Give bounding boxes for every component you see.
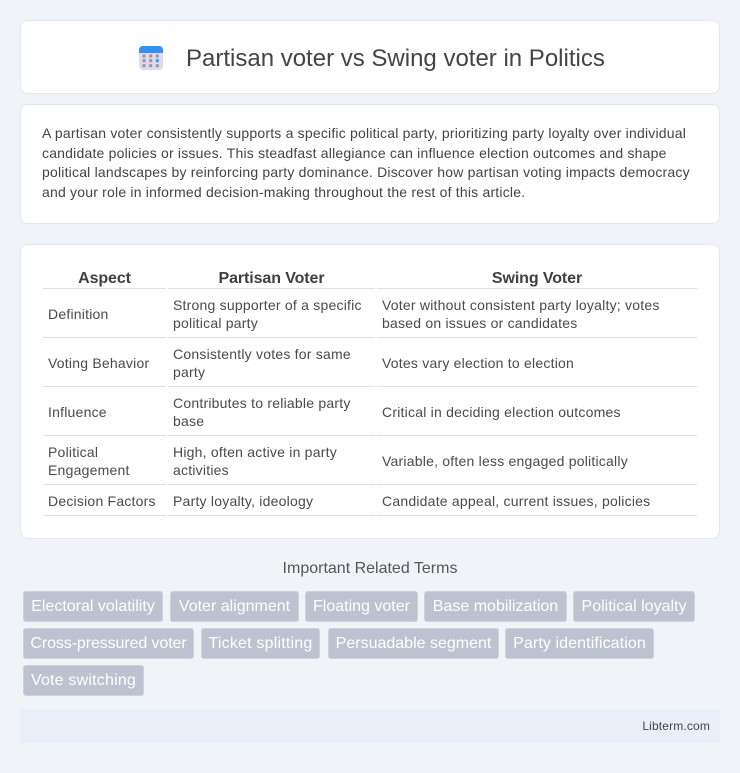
- panel: header: [20, 20, 720, 94]
- text: Strong supporter of a specific: [173, 297, 362, 313]
- row: Political Engagement: Political: [48, 444, 98, 460]
- text block: introduction: political landscapes by reinforcing party dominance. Discover how partisan voting impacts democracy: [42, 164, 690, 180]
- tag: [328, 628, 499, 659]
- text: Party loyalty, ideology: [173, 493, 313, 509]
- text: Consistently votes for same: [173, 346, 351, 362]
- text block: introduction: and your role in informed decision-making throughout the rest of this article.: [42, 184, 525, 200]
- text: base: [173, 413, 204, 429]
- header: Aspect: Aspect: [78, 270, 131, 287]
- tag: [201, 628, 320, 659]
- title: Partisan voter vs Swing voter in Politics: [186, 45, 605, 72]
- header: Partisan Voter: Partisan Voter: [219, 270, 324, 287]
- tag: Floating voter: [313, 598, 410, 615]
- text block: introduction: A partisan voter consistently supports a specific political party, prioritizing party loyalty over individual: [42, 125, 686, 141]
- text: activities: [173, 462, 229, 478]
- panel: comparison table: [20, 244, 720, 539]
- text block: introduction: [42, 125, 690, 200]
- text: Votes vary election to election: [382, 355, 574, 371]
- tag: Vote switching: [31, 672, 136, 689]
- text: High, often active in party: [173, 444, 337, 460]
- tag: [505, 628, 654, 659]
- tag: Ticket splitting: [208, 635, 312, 652]
- tag: Political loyalty: [582, 598, 686, 615]
- row: Political Engagement: Engagement: [48, 462, 130, 478]
- text: party: [173, 364, 205, 380]
- tag: [573, 591, 695, 622]
- comparison table: [43, 270, 697, 516]
- tag: [23, 665, 144, 696]
- header: Swing Voter: Swing Voter: [492, 270, 582, 287]
- footer bar: [20, 709, 720, 743]
- row: Political Engagement: [48, 444, 130, 478]
- text: Critical in deciding election outcomes: [382, 404, 621, 420]
- row: Decision Factors: Decision Factors: [48, 493, 156, 509]
- row: Voting Behavior: Voting Behavior: [48, 355, 149, 371]
- tag: [424, 591, 567, 622]
- tag: Base mobilization: [433, 598, 558, 615]
- tags: related terms: [23, 591, 695, 696]
- footer credit: Libterm.com: [642, 719, 710, 733]
- tag: Voter alignment: [179, 598, 290, 615]
- text: political party: [173, 315, 258, 331]
- tag: Cross-pressured voter: [30, 635, 187, 652]
- text: based on issues or candidates: [382, 315, 578, 331]
- text: Variable, often less engaged politically: [382, 453, 628, 469]
- row: Definition: Definition: [48, 306, 109, 322]
- icon: calendar: [139, 46, 163, 70]
- tag: [305, 591, 418, 622]
- tag: Party identification: [513, 635, 646, 652]
- tag: [170, 591, 299, 622]
- text: Contributes to reliable party: [173, 395, 351, 411]
- tag: Electoral volatility: [31, 598, 155, 615]
- text: Candidate appeal, current issues, policies: [382, 493, 650, 509]
- text: Voter without consistent party loyalty; votes: [382, 297, 660, 313]
- row: Influence: Influence: [48, 404, 107, 420]
- tag: [23, 628, 194, 659]
- panel: introduction: [20, 104, 720, 224]
- tag: Persuadable segment: [336, 635, 491, 652]
- text block: introduction: candidate policies or issues. This steadfast allegiance can influence election outcomes and shape: [42, 145, 667, 161]
- heading: related terms: Important Related Terms: [283, 560, 457, 577]
- tag: [23, 591, 163, 622]
